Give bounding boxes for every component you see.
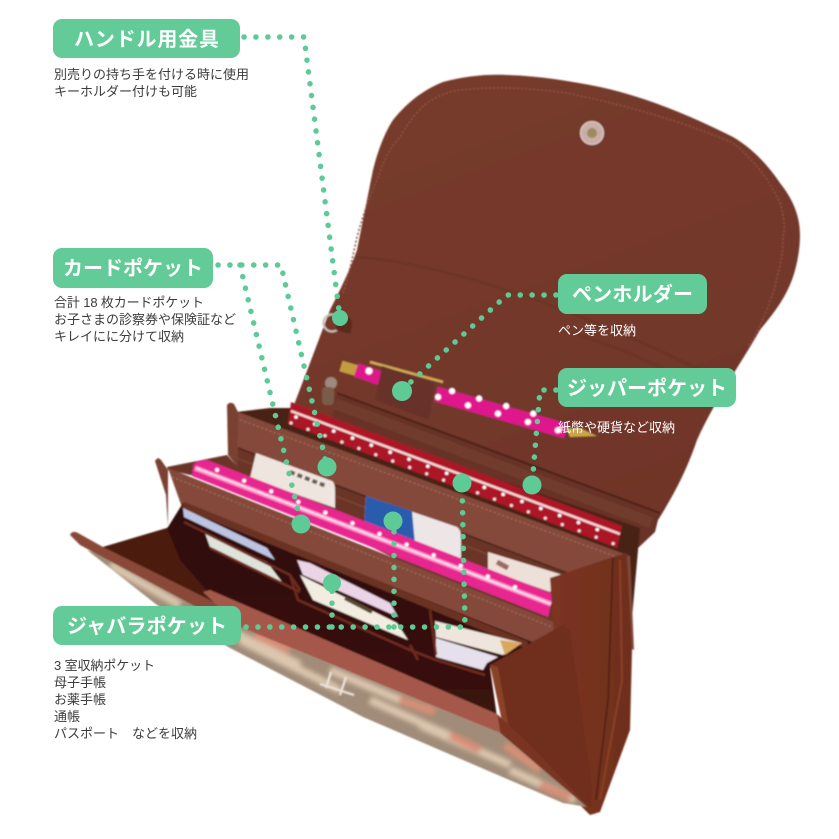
text: card pocket description [54,295,236,344]
text: accordion pocket description: 母子手帳 [54,675,106,690]
leader line: handle fitting [244,37,348,326]
text: card pocket description: キレイにに分けて収納 [54,329,184,344]
zip fastener charm [322,377,337,405]
cards: lower left [183,508,282,582]
text: accordion pocket description: お薬手帳 [54,692,106,707]
label: pen holder: ペンホルダー [572,282,693,306]
open flap [292,75,800,556]
leader line: accordion pocket to front [323,574,341,627]
panel: lower dark interior [103,503,540,717]
wallet photo illustration [70,75,800,815]
label: accordion pocket [53,606,241,645]
text: zip pocket description: 紙幣や硬貨など収納 [558,420,675,435]
handle ring fitting [324,314,352,334]
label: card pocket: カードポケット [63,257,203,280]
label: handle fitting: ハンドル用金具 [74,28,219,51]
leader line: card pocket upper [218,265,336,476]
rear pocket end post [227,403,238,465]
text: accordion pocket description: 3 室収納ポケット [54,658,155,673]
leader line: accordion pocket to rear [246,474,472,627]
pocket fronts [184,522,485,675]
inner gusset [490,625,592,808]
label: handle fitting [53,19,240,58]
pen [341,362,597,437]
card: blue [364,496,461,562]
text: handle fitting description: 別売りの持ち手を付ける時に使用 [54,67,249,82]
icon: snap button [580,122,604,144]
text: pen holder description: ペン等を収納 [558,323,636,338]
cards: lower middle [297,560,408,640]
leader line: zip pocket [522,390,556,494]
front rim [70,532,596,815]
leader line: card pocket lower [240,265,310,534]
middle pocket rim [167,455,240,480]
text: card pocket description: 合計 18 枚カードポケット [54,295,204,310]
panel: rear pocket divider [236,412,634,650]
text: handle fitting description: キーホルダー付けも可能 [54,84,197,99]
rear dark interior [236,408,640,640]
label: card pocket [53,248,213,288]
zip pocket [330,393,660,548]
red case [288,402,622,548]
clasp [320,672,354,695]
text: accordion pocket description [54,658,197,741]
outer right gusset [550,553,632,815]
leader line: accordion pocket to middle [384,512,402,627]
label: zip pocket [558,368,736,407]
text: accordion pocket description: パスポート などを収納 [54,726,197,741]
text: card pocket description: お子さまの診察券や保険証など [54,312,236,327]
card: white rear right [488,552,563,592]
panel: front pocket divider [155,458,562,660]
label: zip pocket: ジッパーポケット [567,377,727,400]
cards: lower right [435,621,522,670]
text: handle fitting description [54,67,249,99]
text: accordion pocket description: 通帳 [54,709,80,724]
front face with pattern [87,550,587,807]
label: accordion pocket: ジャバラポケット [67,615,227,638]
card: white rear left [250,453,335,508]
pink case [192,460,553,617]
leader line: pen holder [392,295,556,401]
label: pen holder [558,274,707,314]
